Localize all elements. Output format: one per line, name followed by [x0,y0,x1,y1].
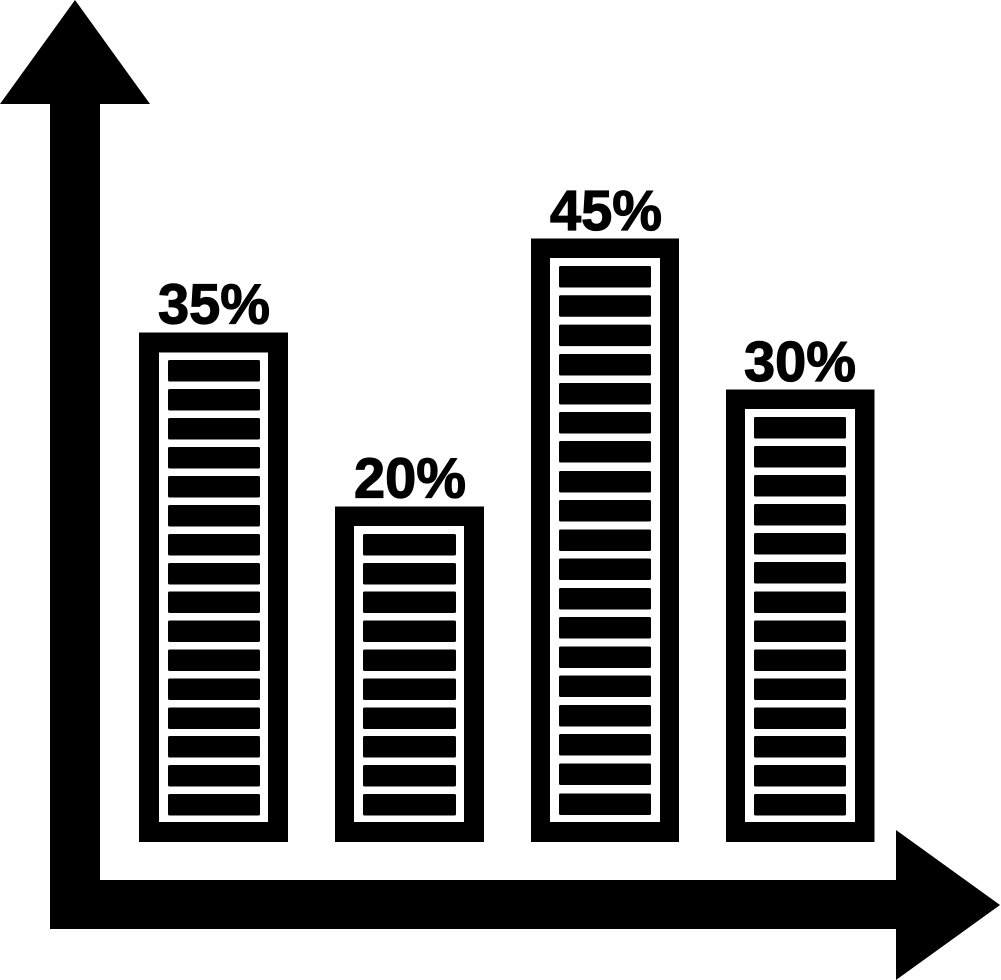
bar: 45% [531,179,679,842]
bar: 35% [139,272,288,842]
label: 35%: 35% [158,272,270,336]
label: 45%: 45% [550,179,662,243]
bar: 30% [726,330,874,842]
label: 30%: 30% [744,330,856,394]
bar: 20% [335,446,484,842]
label: 20%: 20% [354,446,466,510]
